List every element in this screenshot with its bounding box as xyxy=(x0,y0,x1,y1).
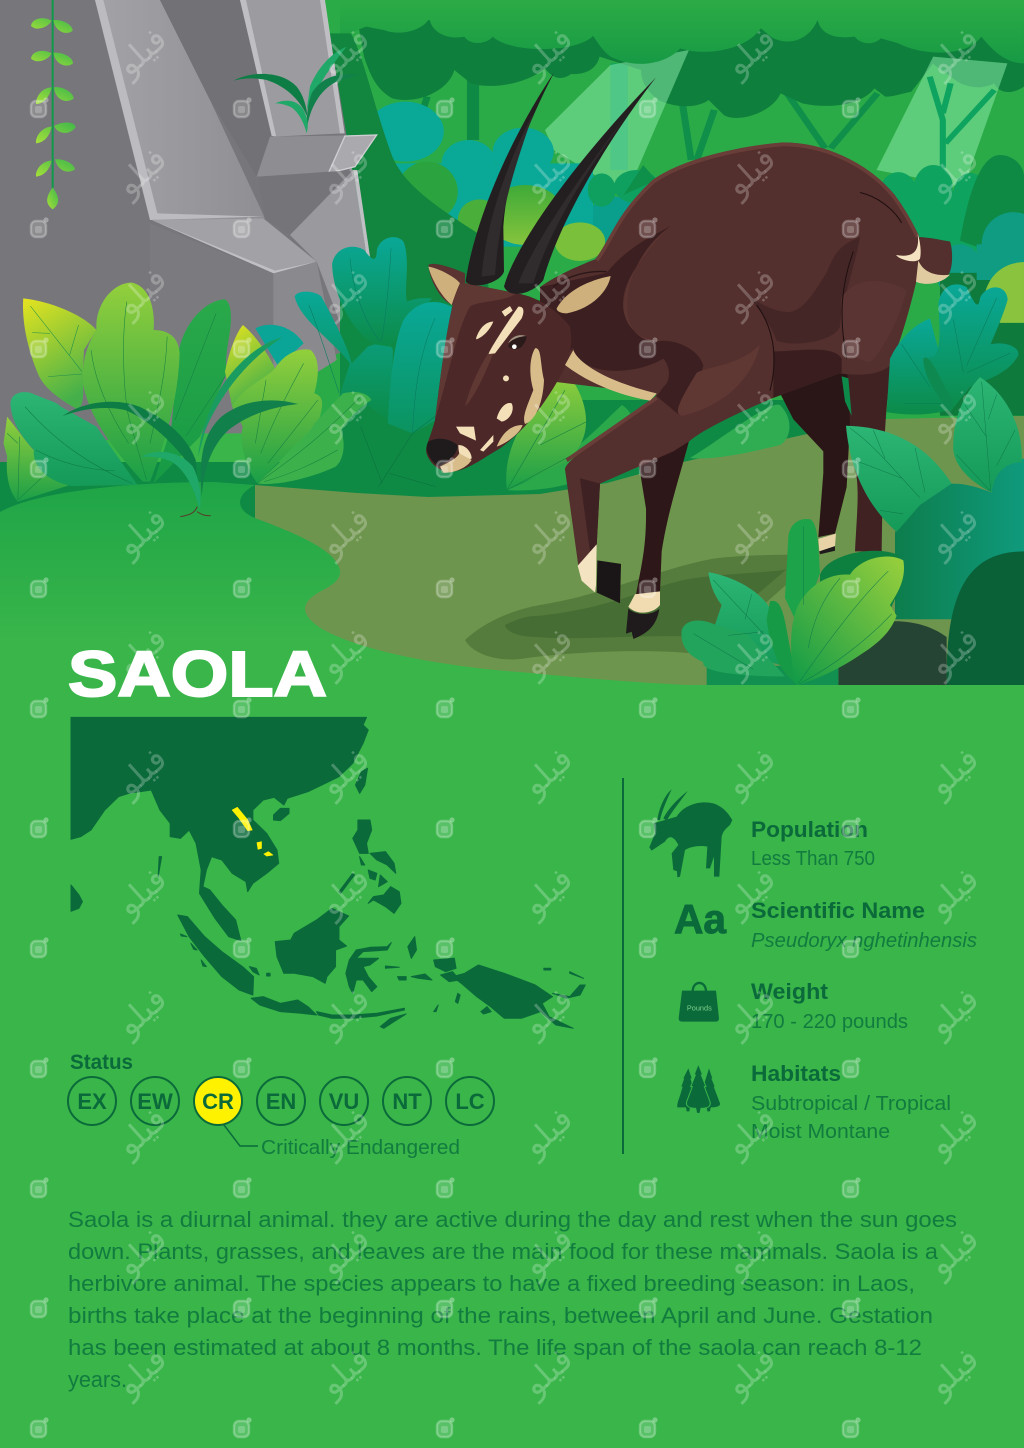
habitats text: Moist Montane xyxy=(751,1121,890,1143)
back highlight xyxy=(597,144,918,260)
upper leaf left xyxy=(846,426,952,532)
icon: trees xyxy=(677,1064,720,1113)
weight text: 170 - 220 pounds xyxy=(751,1011,908,1033)
status labels: NT xyxy=(392,1089,422,1114)
dark bush xyxy=(895,459,1024,619)
illustration: olive ground xyxy=(255,416,1024,690)
illustration: leaves beside head xyxy=(506,372,789,490)
shoulder patch xyxy=(678,344,760,416)
icon: weight bag: Pounds xyxy=(687,1004,712,1013)
description text: has been estimated at about 8 months. The life span of the saola can reach 8-12 xyxy=(68,1335,922,1360)
status labels: LC xyxy=(455,1089,485,1114)
dark bush shapes xyxy=(947,551,1024,687)
habitats text: Habitats xyxy=(751,1061,841,1086)
callout: critically endangered xyxy=(224,1125,460,1159)
icon: hanging vine xyxy=(31,0,76,209)
description text: years. xyxy=(68,1367,127,1392)
left horn xyxy=(466,73,554,285)
population text: Population xyxy=(751,817,868,842)
status labels xyxy=(77,1089,485,1114)
description text xyxy=(68,1207,957,1392)
dark foliage backing xyxy=(0,300,830,522)
front plant xyxy=(681,519,904,685)
icon: plant on ledge xyxy=(233,47,359,133)
teal leaves xyxy=(887,284,1018,414)
illustration: rock cliff xyxy=(0,0,377,480)
habitats text: Subtropical / Tropical xyxy=(751,1093,951,1115)
teal plant xyxy=(332,237,454,487)
icon: letters Aa: Aa xyxy=(674,896,727,942)
description text: Saola is a diurnal animal. they are active during the day and rest when the sun goes xyxy=(68,1207,957,1232)
right horn xyxy=(504,77,656,294)
habitats text xyxy=(751,1061,951,1143)
status labels: EW xyxy=(137,1089,173,1114)
status labels: EX xyxy=(77,1089,107,1114)
flank shade xyxy=(740,237,860,344)
canopy dark xyxy=(357,20,1024,118)
status section xyxy=(68,1051,494,1159)
icon: weight bag xyxy=(679,983,719,1022)
info panel background xyxy=(0,685,1024,1448)
callout: critically endangered: Critically Endangered xyxy=(261,1137,460,1159)
canopy bright top xyxy=(340,0,1024,64)
head, drawn in zoom coordinates xyxy=(426,73,657,473)
weight text: Weight xyxy=(751,979,829,1004)
tail xyxy=(896,234,950,284)
map of Southeast Asia xyxy=(71,717,585,1028)
light rays xyxy=(545,50,1007,197)
bushes right of antelope xyxy=(879,155,1024,416)
near hind leg xyxy=(773,359,850,554)
tree right xyxy=(930,77,994,168)
mainland Asia xyxy=(71,717,368,941)
neck shade xyxy=(540,226,703,416)
illustration: grass plant xyxy=(62,337,298,517)
title: SAOLA xyxy=(68,638,327,710)
body xyxy=(540,142,952,566)
scientific name text: Pseudoryx nghetinhensis xyxy=(751,930,977,952)
illustration: right foliage xyxy=(681,284,1024,687)
divider xyxy=(622,778,624,1154)
illustration: saola xyxy=(426,73,952,639)
population text: Less Than 750 xyxy=(751,848,875,870)
bushes behind antelope xyxy=(314,33,659,300)
status labels: CR xyxy=(202,1089,234,1114)
body and legs xyxy=(540,142,952,639)
status scale xyxy=(68,1077,494,1125)
islands xyxy=(71,768,585,1028)
description text: herbivore animal. The species appears to have a fixed breeding season: in Laos, xyxy=(68,1271,915,1296)
status labels: VU xyxy=(329,1089,359,1114)
status heading: Status xyxy=(70,1051,133,1074)
illustration: jungle background xyxy=(300,0,1024,420)
scientific name text: Scientific Name xyxy=(751,898,925,923)
status labels: EN xyxy=(266,1089,296,1114)
illustration: foreground ground xyxy=(0,482,712,686)
far foreleg xyxy=(626,437,690,639)
icon: antelope silhouette xyxy=(649,789,732,877)
description text: down. Plants, grasses, and leaves are the main food for these mammals. Saola is a xyxy=(68,1239,939,1264)
population text xyxy=(751,817,875,870)
illustration: ground shadow xyxy=(465,555,820,659)
scientific name text xyxy=(751,898,977,952)
weight text xyxy=(751,979,908,1033)
upper leaf right xyxy=(953,377,1022,492)
illustration: left foliage xyxy=(4,237,454,502)
near foreleg xyxy=(567,398,657,603)
saola range xyxy=(232,807,273,856)
description text: births take place at the beginning of the rains, between April and June. Gestation xyxy=(68,1303,933,1328)
far hind leg xyxy=(840,351,893,551)
trees: trunks xyxy=(423,63,877,170)
